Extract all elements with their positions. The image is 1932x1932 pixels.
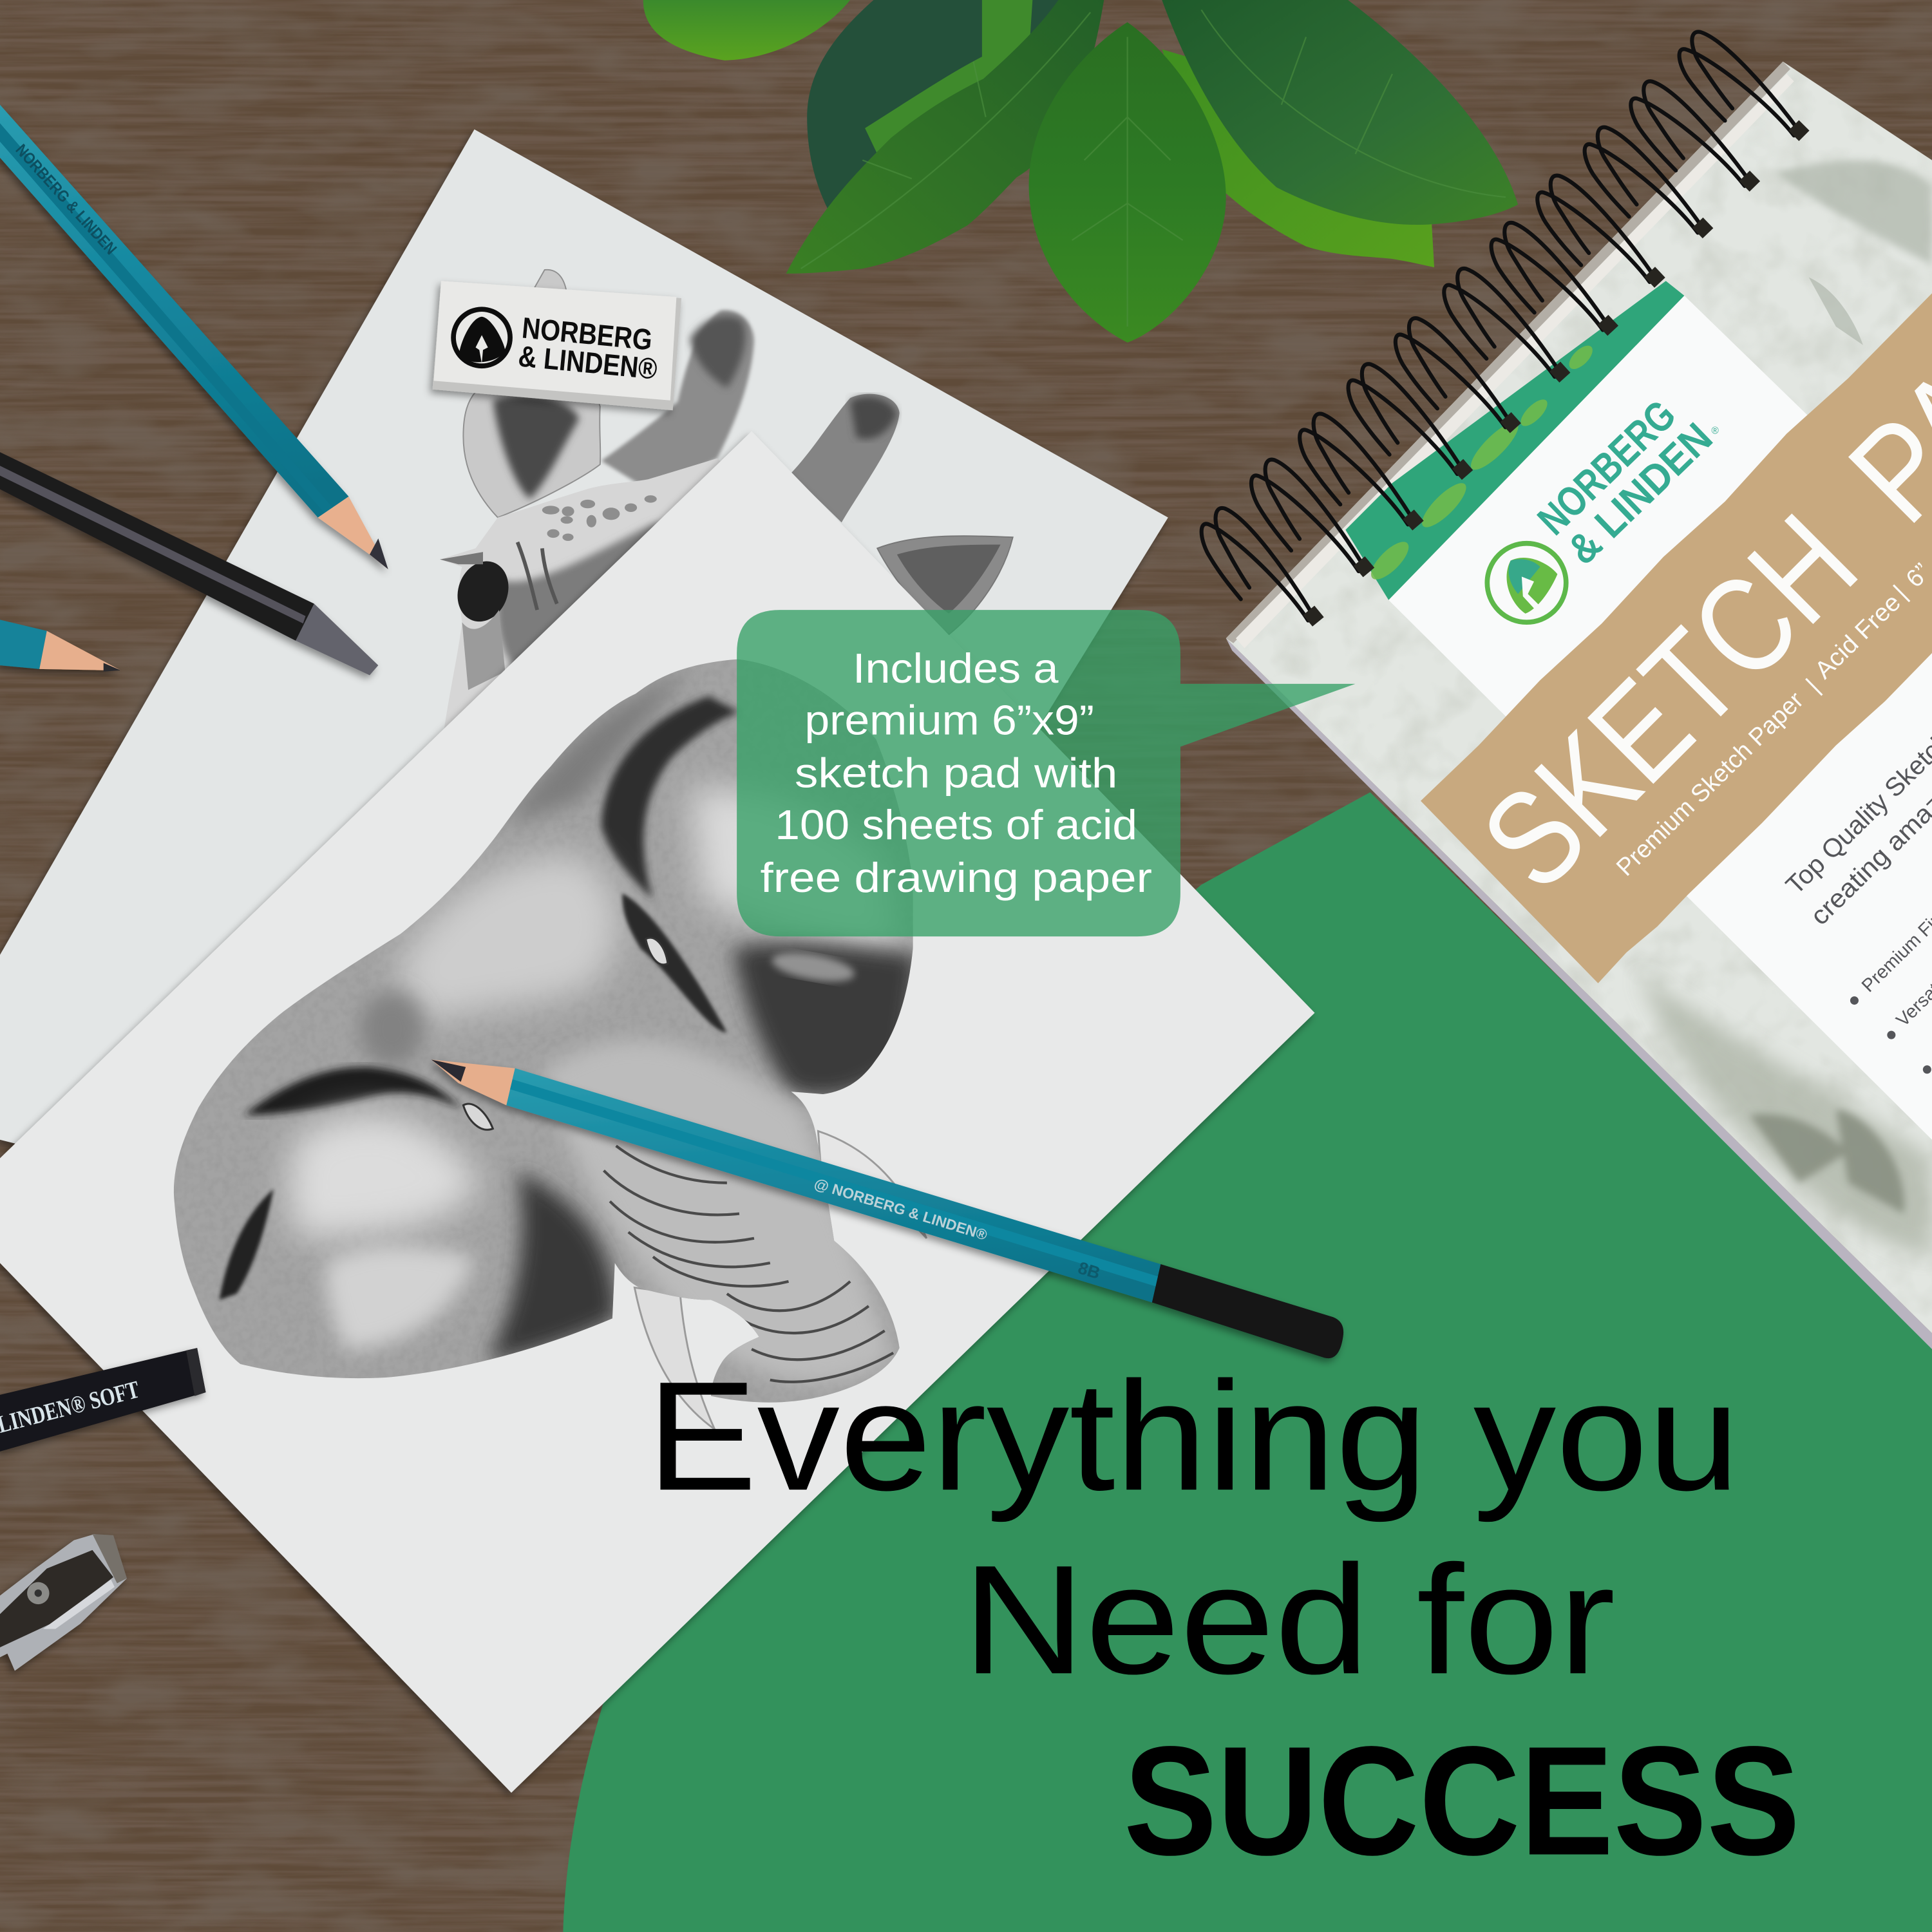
trunk tone (542, 1041, 893, 1383)
bubble text: sketch pad with (795, 750, 1117, 797)
green band splatter (1365, 341, 1596, 585)
kraft paper band (1421, 293, 1932, 983)
registered mark on label: ® (1712, 425, 1719, 436)
pencil wood cone (431, 1059, 515, 1105)
brand logo on label (1487, 544, 1566, 622)
sketch pad: & LINDEN (1558, 413, 1721, 573)
leaf veins (801, 10, 1506, 327)
leaf under right (1162, 50, 1434, 267)
brow shadow (622, 893, 727, 1032)
elephant body silhouette (174, 659, 913, 1403)
back sheet of paper with giraffe sketch (0, 129, 1168, 1232)
main pencil on elephant sheet (431, 1059, 1343, 1358)
giraffe horn two (791, 394, 900, 522)
eraser (433, 281, 681, 410)
left ear brow shadow (244, 1067, 462, 1115)
bubble text (760, 645, 1152, 901)
kraft sub-heading: | (1888, 580, 1912, 604)
leaf dark behind (807, 0, 1084, 209)
stick label: LINDEN® SOFT (0, 1376, 142, 1439)
pencil: black graphite (0, 452, 378, 675)
title line three: SUCCESS (1124, 1714, 1800, 1888)
giraffe left ear (463, 270, 600, 518)
forehead light (394, 856, 618, 1023)
elephant pencil drawing (148, 641, 936, 1429)
leaf top-left (643, 0, 850, 61)
bubble text: Includes a (853, 645, 1059, 692)
tusk right (818, 1131, 927, 1238)
leaf right large (1162, 0, 1518, 225)
pad cover (1226, 62, 1932, 1333)
green band (1345, 281, 1684, 600)
giraffe spots (542, 495, 657, 541)
pencil brand text: @ NORBERG & LINDEN® (812, 1175, 989, 1244)
callout: speech bubble (737, 610, 1356, 936)
cover texture (1220, 62, 1932, 1343)
small pale leaf (865, 0, 1032, 154)
bubble shape (737, 610, 1356, 936)
ear lower folds (326, 1246, 475, 1349)
title line two: Need for (962, 1533, 1615, 1707)
pencil brand text: NORBERG & LINDEN (12, 141, 120, 258)
pencil sharpener (0, 1534, 127, 1671)
pencil: teal stub (0, 620, 121, 672)
brand name on label: NORBERG (1529, 391, 1685, 544)
giraffe sketch (440, 270, 1013, 733)
green background shape (563, 792, 1932, 1932)
title (647, 1350, 1800, 1888)
bubble text: free drawing paper (760, 854, 1152, 901)
title line one: Everything you (647, 1350, 1740, 1523)
ear bottom shadow (487, 1171, 616, 1361)
right ear highlight (770, 948, 857, 987)
paper: elephant sheet (0, 431, 1314, 1793)
ear root patch (360, 992, 424, 1066)
left ear light (289, 1115, 480, 1238)
ear fold shadow (601, 696, 739, 900)
kraft sub-heading: Acid Free (1810, 589, 1906, 685)
sketch pad (1193, 32, 1932, 1349)
kraft sub-heading: | (1801, 674, 1825, 698)
front sheet of paper with elephant sketch (0, 431, 1314, 1793)
leaf left center (786, 0, 1104, 274)
white label and page (1388, 296, 1932, 1140)
giraffe eye (450, 554, 516, 629)
trunk wrinkles (604, 1146, 893, 1382)
lower eye (463, 1104, 493, 1130)
pencil: teal top left (0, 105, 388, 569)
eraser logo (451, 307, 513, 368)
pencil graphite tip (431, 1059, 466, 1082)
tusk left (634, 1287, 715, 1429)
pencil teal body (506, 1068, 1160, 1302)
eraser: & LINDEN® (517, 339, 659, 386)
spine board edge (1226, 62, 1790, 643)
right ear dark bottom (733, 943, 918, 1096)
top-right ear light (690, 788, 900, 949)
bullet list (1850, 901, 1932, 1074)
leaf center large (1029, 22, 1226, 343)
giraffe horn one (601, 310, 754, 493)
bubble text: 100 sheets of acid (775, 801, 1137, 848)
giraffe right ear (877, 536, 1013, 634)
paper: giraffe sheet (0, 129, 1168, 1232)
elephant eye (646, 938, 668, 965)
top ear mid tone (505, 672, 690, 826)
giraffe head (440, 459, 788, 733)
kraft sub-heading (1611, 558, 1932, 882)
charcoal stick (0, 1348, 206, 1452)
bubble text: premium 6”x9” (804, 696, 1094, 743)
pencil grade: 8B (1075, 1258, 1103, 1283)
spiral binding (1193, 32, 1810, 627)
kraft sub-heading: Premium Sketch Paper (1611, 687, 1809, 882)
plant leaves (643, 0, 1518, 343)
pad page edge (1226, 638, 1932, 1349)
eraser brand text: NORBERG (520, 310, 654, 357)
pencil black end cap (1152, 1264, 1343, 1358)
left ear crease (220, 1189, 274, 1300)
